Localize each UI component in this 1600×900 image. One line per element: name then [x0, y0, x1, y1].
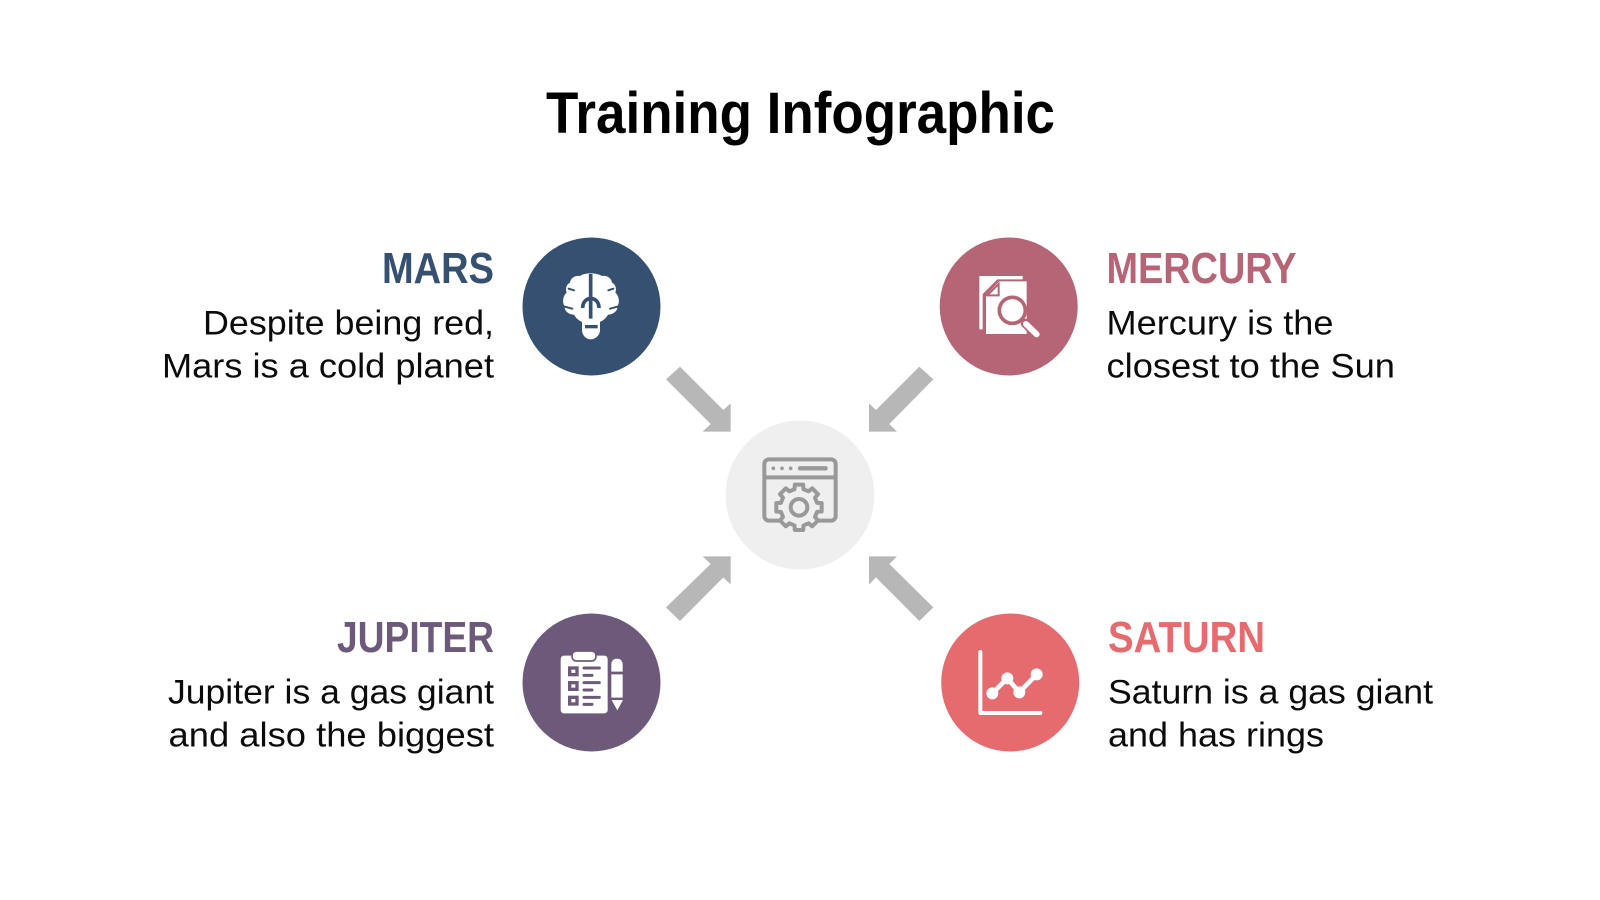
panel: center [726, 420, 874, 570]
text: jupiter description [168, 673, 495, 754]
text: mars description [162, 304, 495, 386]
heading: mars: MARS [382, 244, 494, 293]
text: saturn description [1108, 673, 1434, 754]
text: jupiter description: Jupiter is a gas giant [168, 673, 495, 711]
arrow: mercury to center [869, 367, 933, 432]
panel: jupiter [168, 613, 660, 754]
heading: mercury: MERCURY [1106, 244, 1296, 293]
icon: mars brain bulb [522, 238, 660, 376]
heading: jupiter: JUPITER [337, 613, 494, 662]
arrow: jupiter to center [666, 556, 731, 621]
text: saturn description: and has rings [1108, 716, 1324, 754]
arrow: mars to center [666, 367, 731, 432]
icon: jupiter checklist and pencil [522, 614, 660, 752]
panel: saturn [941, 613, 1434, 754]
text: saturn description: Saturn is a gas giant [1108, 673, 1434, 711]
text: mars description: Mars is a cold planet [162, 348, 495, 386]
icon: browser window with gear [764, 459, 836, 530]
text: mercury description: closest to the Sun [1106, 348, 1395, 386]
text: jupiter description: and also the biggest [168, 716, 495, 754]
panel: mercury [940, 238, 1395, 386]
panel: mars [162, 238, 660, 386]
title: Training Infographic [546, 81, 1055, 146]
heading: saturn: SATURN [1108, 613, 1265, 662]
icon: saturn line chart [941, 614, 1079, 752]
arrow: saturn to center [869, 556, 933, 621]
text: mercury description [1106, 304, 1395, 386]
text: mercury description: Mercury is the [1106, 304, 1334, 342]
text: mars description: Despite being red, [203, 304, 494, 342]
icon: mercury document search [940, 238, 1078, 376]
